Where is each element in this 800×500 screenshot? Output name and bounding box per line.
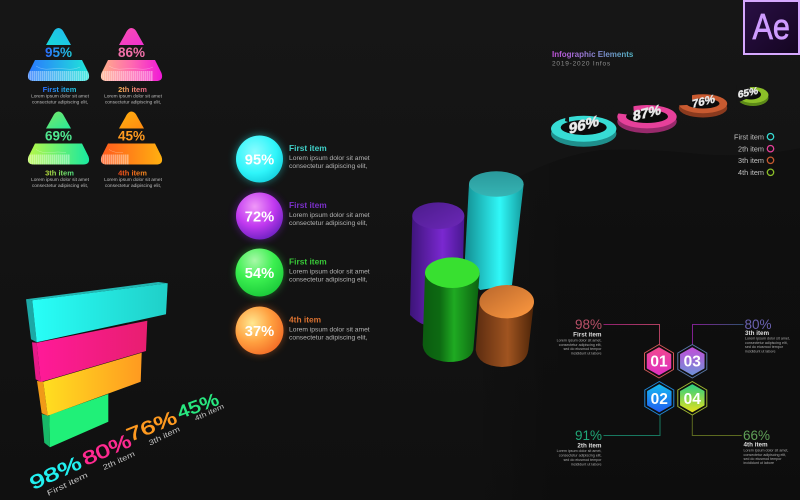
item: 37%: 4th item bbox=[289, 314, 321, 324]
pyramid: 69% 3th item: 3th item bbox=[45, 168, 74, 178]
panel: circle list bbox=[236, 135, 370, 354]
labels: funnel percentages: 98% bbox=[26, 452, 85, 494]
ring: 65%: 65% bbox=[738, 86, 758, 101]
labels: funnel percentages: 80% bbox=[79, 430, 135, 470]
legend: rings: 3th item bbox=[738, 156, 764, 165]
callout: 80% 3th item: 80% bbox=[744, 317, 772, 332]
callout: 91% 2th item: consectetur adipiscing elit, bbox=[559, 454, 602, 458]
hexagon 03: 03 bbox=[684, 354, 701, 370]
bar: cyan bbox=[26, 282, 168, 342]
labels: funnel percentages: 4th item bbox=[193, 402, 225, 423]
item: 95%: First item bbox=[289, 143, 327, 153]
pyramid: 95% first item: 95% bbox=[45, 45, 72, 60]
callout: 98% first item bbox=[557, 317, 602, 356]
ring: 76%: 76% bbox=[692, 92, 716, 111]
item: 72%: 72% bbox=[245, 210, 274, 226]
callout: 91% 2th item bbox=[557, 428, 602, 466]
pyramid: 45% 4th item: Lorem ipsum dolor sit amet bbox=[104, 177, 163, 183]
callout: 66% 4th item: 4th item bbox=[744, 442, 768, 448]
pyramid: 45% 4th item: 4th item bbox=[118, 168, 147, 178]
callout: 80% 3th item bbox=[744, 317, 790, 354]
item: 54%: Lorem ipsum dolor sit amet bbox=[289, 268, 370, 276]
callout: 66% 4th item: consectetur adipiscing elit, bbox=[744, 453, 786, 457]
callout: 98% first item: Lorem ipsum dolor sit amet, bbox=[557, 338, 602, 342]
pyramid: 86% 2th item bbox=[100, 28, 163, 106]
item: 72% bbox=[236, 192, 370, 240]
item: 95% bbox=[236, 135, 370, 183]
callout: 80% 3th item: sed do eiusmod tempor bbox=[745, 345, 784, 349]
labels: funnel percentages: First item bbox=[46, 471, 89, 498]
hexagon 04 bbox=[678, 382, 707, 415]
hexagon 01 bbox=[644, 344, 674, 378]
item: 37%: Lorem ipsum dolor sit amet bbox=[289, 326, 370, 334]
bar: orange yellow bbox=[37, 353, 142, 416]
chart: 3D cylinders bbox=[410, 171, 534, 367]
callout: 98% first item: First item bbox=[573, 332, 602, 338]
title bbox=[552, 50, 634, 68]
pyramid: 86% 2th item: 86% bbox=[118, 45, 145, 60]
callout: 98% first item: 98% bbox=[575, 317, 602, 332]
callout: 66% 4th item: Lorem ipsum dolor sit amet, bbox=[744, 448, 788, 452]
item: 95%: consectetur adipiscing elit, bbox=[289, 163, 368, 170]
cylinder: cyan bbox=[464, 171, 524, 290]
legend: rings: 2th item bbox=[738, 144, 764, 153]
callout: 91% 2th item: 91% bbox=[575, 428, 602, 443]
item: 72%: Lorem ipsum dolor sit amet bbox=[289, 212, 370, 219]
legend: rings bbox=[734, 132, 774, 177]
item: 72%: consectetur adipiscing elit, bbox=[289, 220, 368, 227]
item: 54%: consectetur adipiscing elit, bbox=[289, 276, 368, 284]
bar: green bbox=[42, 394, 108, 447]
legend: rings: First item bbox=[734, 132, 764, 141]
panel: hexagon infographic bbox=[557, 317, 790, 466]
title: Infographic Elements bbox=[552, 50, 634, 59]
ring: 65% bbox=[736, 85, 768, 106]
ring: 96% bbox=[551, 113, 616, 147]
hexagon 02 bbox=[645, 382, 674, 415]
labels: funnel percentages: 2th item bbox=[101, 449, 136, 472]
legend: rings: 4th item bbox=[738, 168, 764, 177]
title: 2019-2020 Infos bbox=[552, 60, 611, 68]
pyramid: 45% 4th item bbox=[100, 112, 163, 189]
cylinder: orange bbox=[476, 285, 534, 367]
callout: 91% 2th item: sed do eiusmod tempor bbox=[563, 458, 602, 462]
callout: 66% 4th item: sed do eiusmod tempor bbox=[744, 457, 782, 461]
pyramid: 45% 4th item: consectetur adipiscing elit, bbox=[105, 183, 161, 189]
pyramid: 69% 3th item: consectetur adipiscing elit, bbox=[32, 183, 88, 189]
callout: 98% first item: incididunt ut labore bbox=[571, 352, 602, 356]
icon: After Effects logo bbox=[744, 1, 799, 54]
labels: funnel percentages: 76% bbox=[123, 406, 180, 446]
ring: 87%: 87% bbox=[633, 102, 661, 125]
callout: 80% 3th item: Lorem ipsum dolor sit amet, bbox=[745, 336, 790, 340]
callout: 91% 2th item: incididunt ut labore bbox=[571, 462, 602, 466]
panel: pyramids bbox=[27, 28, 163, 189]
labels: funnel percentages: 3th item bbox=[147, 424, 181, 447]
chart: 3D rings bbox=[551, 85, 768, 147]
pyramid: 69% 3th item: 69% bbox=[45, 128, 72, 144]
item: 37%: 37% bbox=[245, 324, 274, 340]
pyramid: 95% first item bbox=[27, 28, 90, 106]
item: 37% bbox=[236, 306, 370, 354]
pyramid: 69% 3th item bbox=[27, 112, 90, 189]
callout: 91% 2th item: Lorem ipsum dolor sit amet, bbox=[557, 449, 602, 453]
callout: 98% first item: consectetur adipiscing elit, bbox=[559, 343, 602, 347]
labels: funnel percentages bbox=[26, 390, 225, 498]
callout: 66% 4th item bbox=[743, 428, 788, 465]
item: 37%: consectetur adipiscing elit, bbox=[289, 334, 368, 342]
pyramid: 95% first item: First item bbox=[43, 85, 77, 94]
hexagon 03 bbox=[678, 344, 707, 378]
pyramid: 86% 2th item: consectetur adipiscing elit, bbox=[105, 100, 161, 106]
connector lines bbox=[604, 324, 744, 436]
item: 54% bbox=[236, 248, 370, 296]
item: 54%: First item bbox=[289, 256, 327, 266]
ring: 96%: 96% bbox=[569, 113, 599, 138]
item: 95%: Lorem ipsum dolor sit amet bbox=[289, 155, 370, 162]
pyramid: 95% first item: Lorem ipsum dolor sit amet bbox=[31, 94, 90, 100]
callout: 80% 3th item: 3th item bbox=[745, 330, 770, 337]
ring: 87% bbox=[615, 100, 677, 133]
pyramid: 45% 4th item: 45% bbox=[118, 128, 145, 144]
callout: 80% 3th item: incididunt ut labore bbox=[745, 350, 776, 354]
callout: 66% 4th item: incididunt ut labore bbox=[744, 461, 774, 465]
chart: 3D funnel bars bbox=[26, 282, 225, 498]
pyramid: 95% first item: consectetur adipiscing elit, bbox=[32, 100, 88, 106]
ring: 76% bbox=[677, 90, 727, 118]
item: 72%: First item bbox=[289, 200, 327, 210]
callout: 98% first item: sed do eiusmod tempor bbox=[563, 347, 602, 351]
pyramid: 86% 2th item: Lorem ipsum dolor sit amet bbox=[104, 94, 163, 100]
cylinder: green bbox=[423, 257, 480, 362]
hexagon 04: 04 bbox=[684, 391, 701, 408]
bar: pink bbox=[32, 321, 147, 382]
pyramid: 69% 3th item: Lorem ipsum dolor sit amet bbox=[31, 177, 90, 183]
cylinder: purple bbox=[410, 202, 464, 325]
callout: 80% 3th item: consectetur adipiscing elit, bbox=[745, 341, 788, 345]
hexagon 02: 02 bbox=[651, 391, 668, 408]
icon: After Effects logo: Ae bbox=[752, 8, 790, 48]
callout: 66% 4th item: 66% bbox=[743, 428, 770, 443]
item: 54%: 54% bbox=[245, 266, 274, 282]
hexagon 01: 01 bbox=[650, 354, 668, 370]
callout: 91% 2th item: 2th item bbox=[577, 442, 602, 450]
item: 95%: 95% bbox=[245, 152, 274, 168]
labels: funnel percentages: 45% bbox=[174, 390, 222, 423]
pyramid: 86% 2th item: 2th item bbox=[118, 85, 147, 94]
